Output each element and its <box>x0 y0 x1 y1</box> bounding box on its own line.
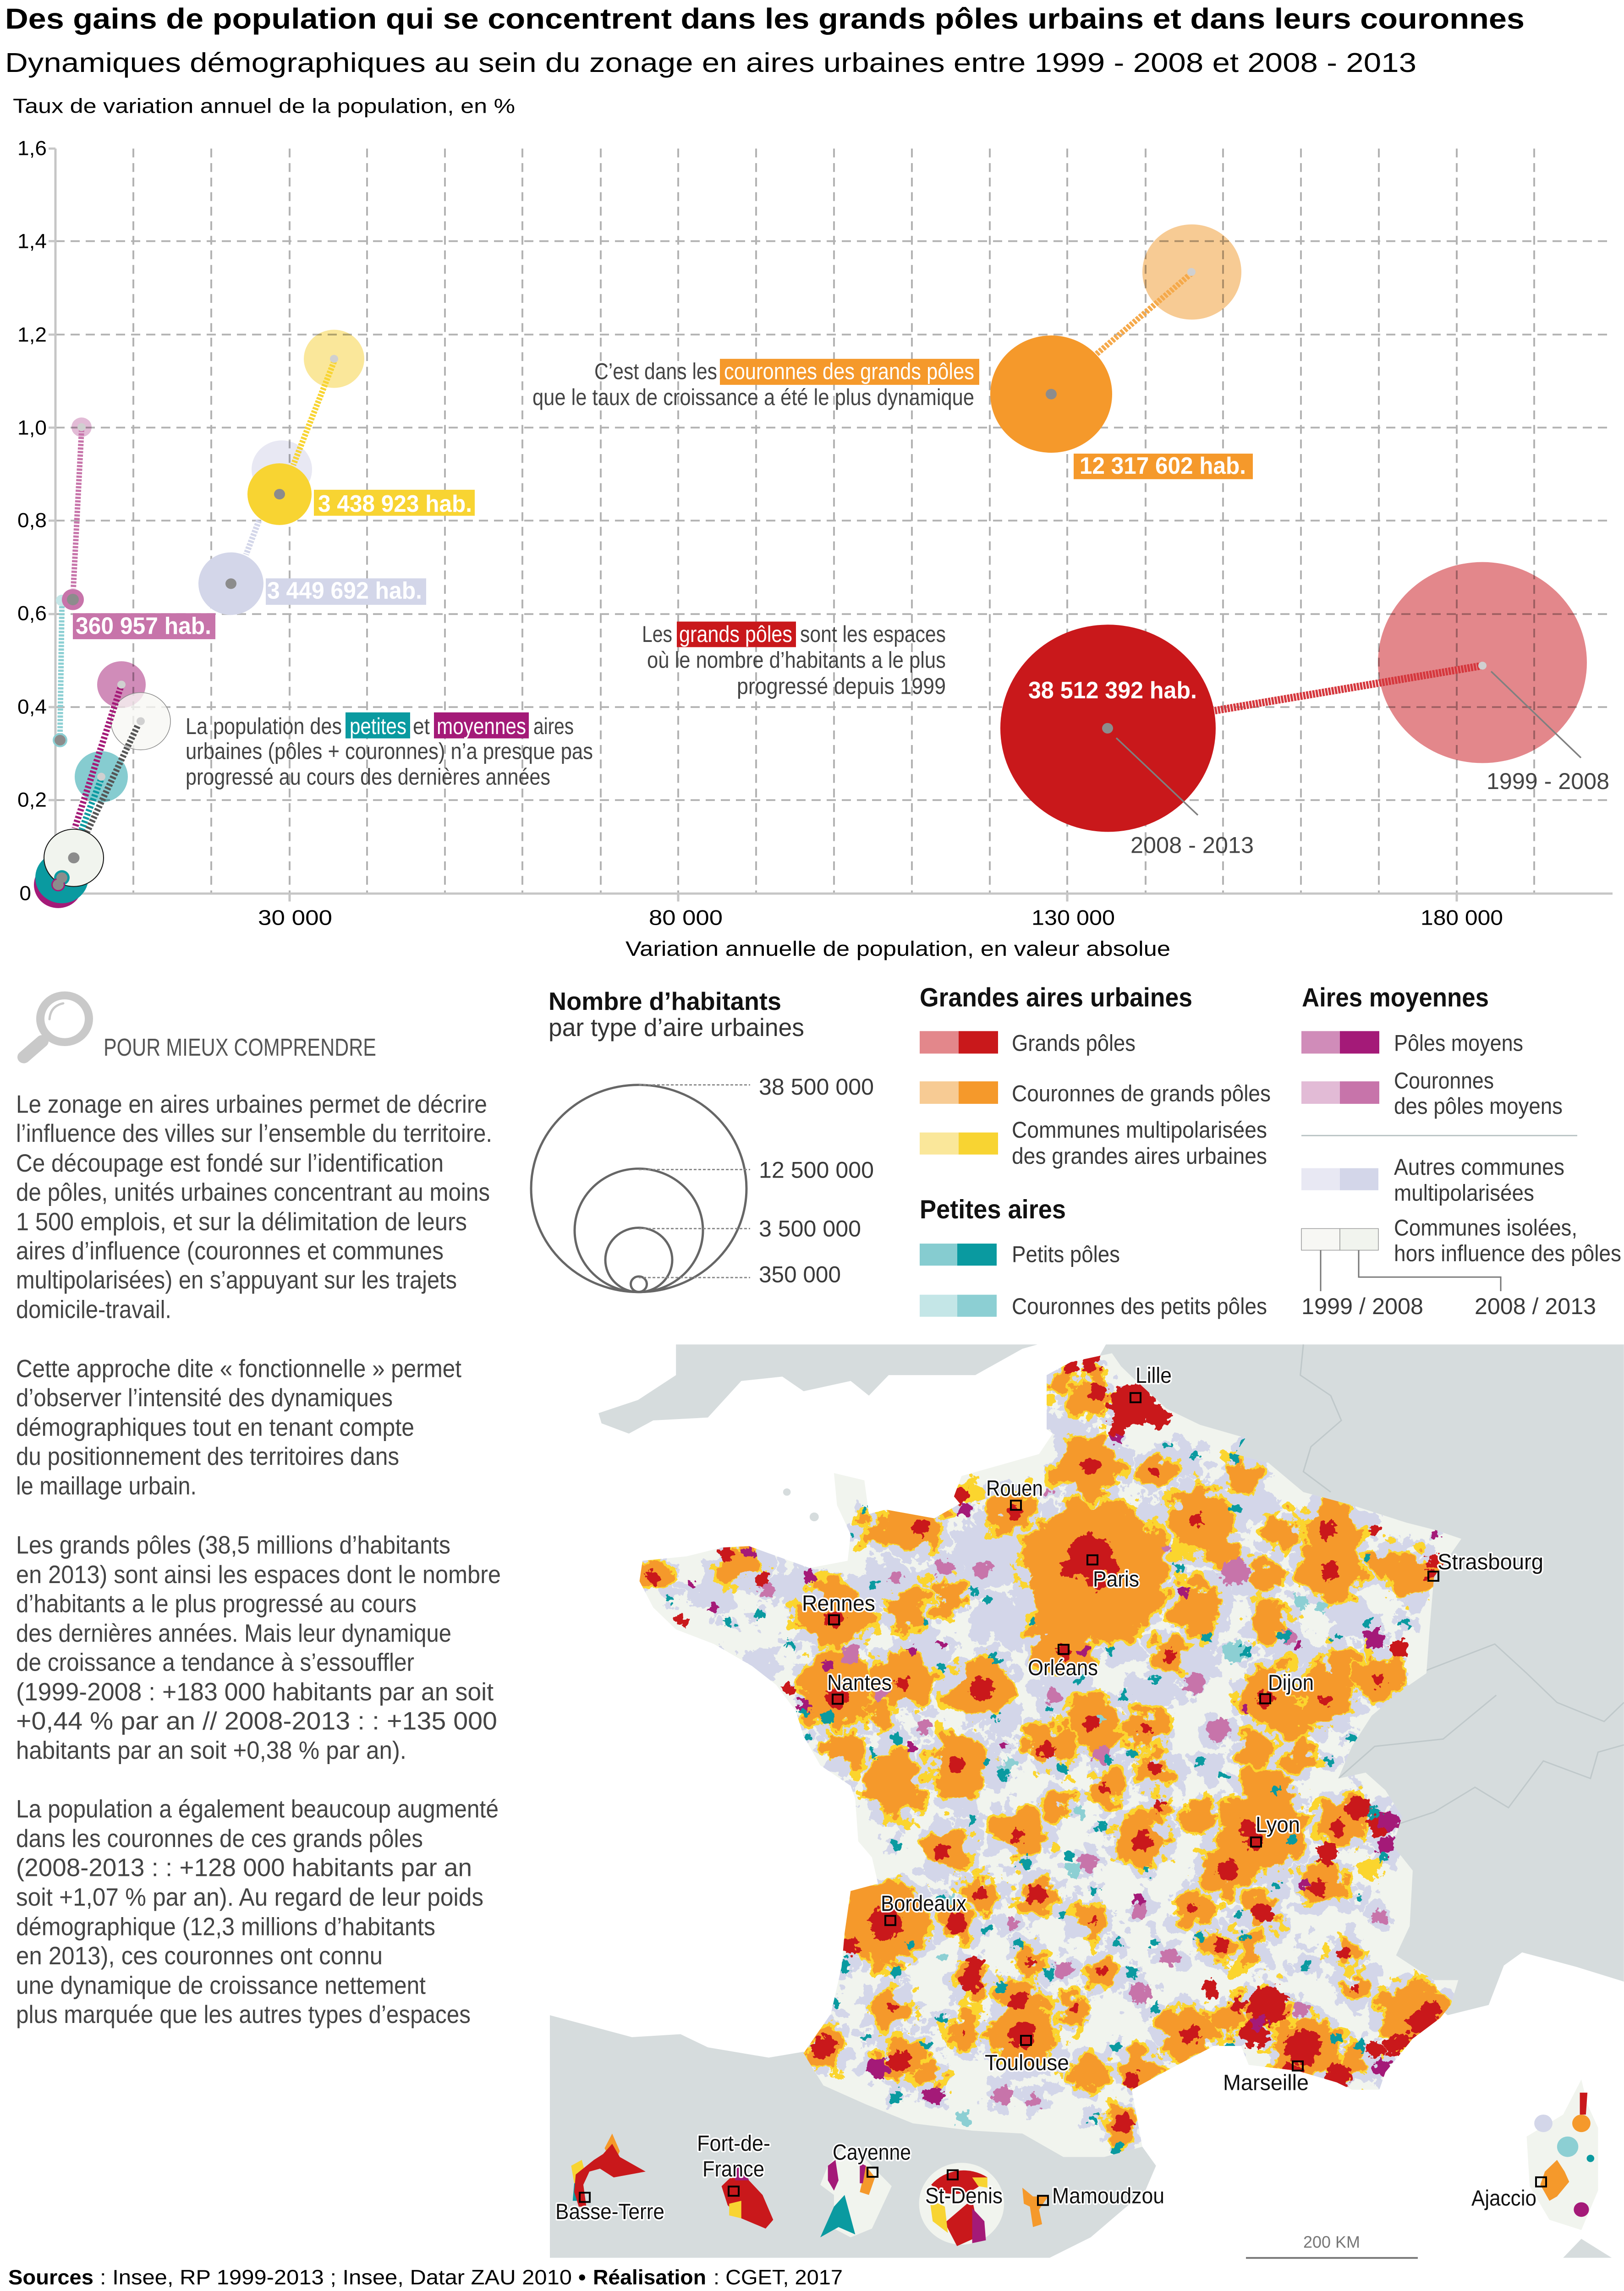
text block: paragraph 1: multipolarisées) en s’appuyant sur les trajets <box>16 1266 457 1294</box>
callout: grands pôles: sont les espaces <box>800 621 946 647</box>
swatch: petits pôles: Petits pôles <box>1012 1241 1120 1267</box>
text block: paragraph 3: d’habitants a le plus progressé au cours <box>16 1589 417 1617</box>
city labels: Basse-Terre <box>555 2200 664 2224</box>
callout: petites et moyennes aires: et <box>413 713 430 739</box>
swatch: couronnes des petits pôles <box>920 1293 1267 1319</box>
swatch: couronnes de grands pôles <box>920 1080 1271 1106</box>
y axis labels: 0 <box>19 882 31 904</box>
city labels: Rouen <box>986 1476 1043 1501</box>
text block: paragraph 1: Le zonage en aires urbaines permet de décrire <box>16 1090 487 1118</box>
legend heading: Nombre d’habitants <box>549 987 781 1015</box>
callout: petites et moyennes aires: urbaines (pôles + couronnes) n’a presque pas <box>186 739 593 764</box>
text block: paragraph 3: habitants par an soit +0,38 % par an). <box>16 1736 406 1765</box>
city labels: Paris <box>1093 1567 1139 1591</box>
text block: paragraph 3: Les grands pôles (38,5 millions d’habitants <box>16 1530 450 1559</box>
teal: petits pôles <box>665 1438 1410 2154</box>
text block: paragraph 1: domicile-travail. <box>16 1295 171 1323</box>
city labels: Marseille <box>1223 2071 1309 2095</box>
text block: paragraph 4: en 2013), ces couronnes ont connu <box>16 1941 383 1970</box>
city labels: Toulouse <box>985 2051 1069 2075</box>
bubbles: petites et moyennes aires, communes isolées <box>34 661 170 908</box>
swatch: pôles moyens <box>1301 1030 1523 1056</box>
Corsica <box>1527 2079 1598 2230</box>
neighbouring land <box>550 1344 1624 2258</box>
text block: paragraph 2: Cette approche dite « fonctionnelle » permet <box>16 1354 461 1382</box>
period label 2008-2013: 2008 - 2013 <box>1130 833 1254 858</box>
label: 12 317 602 hab.: 12 317 602 hab. <box>1080 453 1246 479</box>
swatch: communes isolées <box>1301 1215 1621 1266</box>
subtitle: Dynamiques démographiques au sein du zonage en aires urbaines entre 1999 - 2008 et 2008 - 2013 <box>5 47 1416 78</box>
callout: couronnes des grands pôles: C’est dans les <box>594 358 717 384</box>
city labels: Dijon <box>1268 1671 1314 1695</box>
sources <box>8 2265 843 2289</box>
callout: couronnes des grands pôles: couronnes des grands pôles <box>724 358 974 384</box>
swatch: couronnes des petits pôles: Couronnes des petits pôles <box>1012 1293 1267 1319</box>
callout: petites et moyennes aires: petites <box>350 713 406 739</box>
legend heading: Grandes aires urbaines <box>920 983 1192 1012</box>
city labels: Nantes <box>827 1671 892 1695</box>
sources: : Insee, RP 1999-2013 ; Insee, Datar ZAU 2010 <box>100 2265 572 2289</box>
legend heading: par type d’aire urbaines <box>549 1013 804 1041</box>
swatch: communes multipolarisées: Communes multipolarisées <box>1012 1117 1267 1143</box>
text block: paragraph 3 <box>16 1530 501 1765</box>
text block: paragraph 2: le maillage urbain. <box>16 1471 197 1500</box>
bubbles: couronnes des pôles moyens et petits pôles <box>53 417 92 747</box>
callout: petites et moyennes aires <box>186 713 593 789</box>
bubbles: communes multipolarisées <box>198 330 364 615</box>
chart: bubble scatter <box>13 94 1613 960</box>
title: Des gains de population qui se concentrent dans les grands pôles urbains et dans leurs couronnes <box>5 2 1525 35</box>
period key: 2008 / 2013 <box>1475 1293 1596 1319</box>
light teal: couronnes des petits pôles <box>937 1595 1326 2126</box>
inset: Guadeloupe <box>571 2133 646 2207</box>
legend heading: Petites aires <box>920 1195 1066 1224</box>
city labels: Ajaccio <box>1471 2186 1536 2210</box>
circle value labels: 12 500 000 <box>759 1157 874 1183</box>
label: 3 449 692 hab.: 3 449 692 hab. <box>267 577 422 604</box>
swatch: petits pôles <box>920 1241 1120 1267</box>
city markers <box>580 1393 1546 2205</box>
text block: paragraph 4: soit +1,07 % par an). Au regard de leur poids <box>16 1883 483 1911</box>
lavender: autres communes multipolarisées <box>640 1371 1446 2154</box>
city labels: Rennes <box>802 1591 875 1616</box>
swatch: communes isolées: Communes isolées, <box>1394 1215 1577 1241</box>
inset: La Réunion <box>919 2163 1004 2246</box>
text block: paragraph 3: des dernières années. Mais leur dynamique <box>16 1619 451 1647</box>
y axis labels: 1,6 <box>17 137 47 159</box>
red: grands pôles <box>646 1353 1442 2132</box>
callout: couronnes des grands pôles: que le taux de croissance a été le plus dynamique <box>532 384 974 410</box>
city labels: St-Denis <box>925 2184 1003 2208</box>
y axis labels <box>17 137 47 904</box>
legend heading: Aires moyennes <box>1302 983 1489 1012</box>
x axis labels: 130 000 <box>1031 905 1115 929</box>
panel: pour mieux comprendre <box>16 995 501 2028</box>
swatch: autres communes multipolarisées: Autres communes <box>1394 1154 1564 1180</box>
text block: paragraph 1: 1 500 emplois, et sur la délimitation de leurs <box>16 1207 467 1236</box>
callout: grands pôles: progressé depuis 1999 <box>737 673 946 699</box>
period label 1999-2008: 1999 - 2008 <box>1487 768 1609 794</box>
city labels: Strasbourg <box>1437 1550 1543 1574</box>
text block: paragraph 3: de croissance a tendance à s’essouffler <box>16 1648 414 1676</box>
inset: Martinique <box>722 2167 773 2229</box>
city labels: Lyon <box>1256 1813 1300 1837</box>
bubbles: couronnes de grands pôles <box>990 225 1241 453</box>
legend: aires moyennes <box>1301 983 1621 1319</box>
callout: petites et moyennes aires: aires <box>533 713 574 739</box>
text block: paragraph 4: plus marquée que les autres types d’espaces <box>16 2000 471 2028</box>
inset: Guyane <box>820 2147 892 2237</box>
city labels: Orléans <box>1028 1656 1098 1680</box>
text block: paragraph 1: de pôles, unités urbaines concentrant au moins <box>16 1178 490 1206</box>
swatch: pôles moyens: Pôles moyens <box>1394 1030 1523 1056</box>
text block: paragraph 2: du positionnement des territoires dans <box>16 1442 399 1470</box>
pink: couronnes des pôles moyens <box>760 1486 1387 2109</box>
y axis labels: 0,2 <box>17 788 47 811</box>
swatch: autres communes multipolarisées <box>1301 1154 1564 1206</box>
callout: petites et moyennes aires: La population des <box>186 713 342 739</box>
callout: couronnes des grands pôles <box>532 358 979 410</box>
sources: Réalisation <box>593 2265 706 2289</box>
text block: paragraph 2 <box>16 1354 461 1500</box>
y axis labels: 1,0 <box>17 416 47 439</box>
text block: paragraph 1 <box>16 1090 492 1323</box>
text block: paragraph 3: en 2013) sont ainsi les espaces dont le nombre <box>16 1560 501 1589</box>
city labels: Mamoudzou <box>1052 2184 1164 2208</box>
label: 360 957 hab.: 360 957 hab. <box>76 613 211 639</box>
x axis labels: 80 000 <box>649 905 723 929</box>
circle value labels: 3 500 000 <box>759 1216 861 1241</box>
text block: paragraph 1: Ce découpage est fondé sur l’identification <box>16 1149 444 1177</box>
text block: paragraph 1: l’influence des villes sur l’ensemble du territoire. <box>16 1119 492 1147</box>
text block: paragraph 4: une dynamique de croissance nettement <box>16 1971 426 1999</box>
circle value labels: 350 000 <box>759 1262 841 1288</box>
icon: magnifying glass <box>24 995 89 1057</box>
callout: petites et moyennes aires: moyennes <box>437 713 526 739</box>
legend: nombre d'habitants <box>531 987 874 1292</box>
legend: petites aires <box>920 1195 1267 1319</box>
text block: paragraph 4: (2008-2013 : : +128 000 habitants par an <box>16 1853 472 1881</box>
y axis labels: 1,4 <box>17 230 47 252</box>
city labels: Lille <box>1136 1364 1172 1388</box>
text block: paragraph 2: démographiques tout en tenant compte <box>16 1413 414 1441</box>
yellow: communes multipolarisées <box>640 1371 1446 2139</box>
period key <box>1301 1250 1596 1319</box>
sources: : CGET, 2017 <box>713 2265 843 2289</box>
swatch: autres communes multipolarisées: multipolarisées <box>1394 1180 1534 1206</box>
callout: grands pôles: grands pôles <box>679 621 792 647</box>
legend: grandes aires urbaines <box>920 983 1271 1169</box>
city labels: Bordeaux <box>881 1892 966 1916</box>
sources: • <box>578 2265 586 2289</box>
circle value labels: 38 500 000 <box>759 1074 874 1100</box>
text block: paragraph 4 <box>16 1795 499 2028</box>
swatch: couronnes des pôles moyens: Couronnes <box>1394 1068 1494 1093</box>
label: 3 438 923 hab.: 3 438 923 hab. <box>318 491 472 517</box>
period key: 1999 / 2008 <box>1301 1293 1423 1319</box>
nested proportional circles <box>531 1085 746 1292</box>
inset: Mayotte <box>1022 2187 1048 2227</box>
text block: paragraph 4: La population a également beaucoup augmenté <box>16 1795 499 1823</box>
callout: petites et moyennes aires: progressé au cours des dernières années <box>186 764 550 789</box>
swatch: communes multipolarisées: des grandes aires urbaines <box>1012 1143 1267 1169</box>
swatch: couronnes des pôles moyens <box>1301 1068 1563 1119</box>
x axis title: Variation annuelle de population, en valeur absolue <box>625 937 1170 960</box>
heading: POUR MIEUX COMPRENDRE <box>104 1033 376 1061</box>
callout: grands pôles: où le nombre d’habitants a le plus <box>647 647 946 673</box>
text block: paragraph 3: +0,44 % par an // 2008-2013 : : +135 000 <box>16 1706 497 1735</box>
city labels <box>555 1364 1543 2224</box>
text block: paragraph 1: aires d’influence (couronnes et communes <box>16 1237 444 1265</box>
swatch: couronnes de grands pôles: Couronnes de grands pôles <box>1012 1080 1271 1106</box>
city labels: Fort-de- <box>697 2132 770 2156</box>
purple: pôles moyens <box>686 1435 1440 2103</box>
legend heading <box>549 987 804 1041</box>
sources: Sources <box>8 2265 93 2289</box>
scale bar: 200 KM <box>1303 2232 1360 2252</box>
x axis labels <box>258 905 1503 929</box>
swatch: grands pôles: Grands pôles <box>1012 1030 1136 1056</box>
x axis labels: 30 000 <box>258 905 332 929</box>
bubbles: grands pôles <box>1000 562 1587 832</box>
swatch: grands pôles <box>920 1030 1136 1056</box>
text block: paragraph 3: (1999-2008 : +183 000 habitants par an soit <box>16 1677 494 1706</box>
callout: grands pôles: Les <box>642 621 672 647</box>
city labels: Cayenne <box>833 2140 911 2165</box>
y axis labels: 1,2 <box>17 323 47 346</box>
label: 38 512 392 hab.: 38 512 392 hab. <box>1028 677 1197 704</box>
y axis title: Taux de variation annuel de la population, en % <box>13 94 515 117</box>
y axis labels: 0,8 <box>17 509 47 532</box>
map of France <box>550 1344 1624 2258</box>
text block: paragraph 4: démographique (12,3 millions d’habitants <box>16 1913 435 1940</box>
map data layers <box>640 1353 1446 2154</box>
x axis labels: 180 000 <box>1421 905 1503 929</box>
callout: grands pôles <box>642 621 946 699</box>
orange: couronnes de grands pôles <box>640 1371 1446 2139</box>
text block: paragraph 4: dans les couronnes de ces grands pôles <box>16 1824 423 1853</box>
city labels: France <box>702 2157 764 2181</box>
y axis labels: 0,4 <box>17 695 47 718</box>
swatch: couronnes des pôles moyens: des pôles moyens <box>1394 1093 1563 1119</box>
circle value labels <box>759 1074 874 1288</box>
swatch: communes multipolarisées <box>920 1117 1267 1169</box>
y axis labels: 0,6 <box>17 602 47 625</box>
metropolitan France base <box>640 1353 1461 2157</box>
text block: paragraph 2: d’observer l’intensité des dynamiques <box>16 1383 393 1412</box>
